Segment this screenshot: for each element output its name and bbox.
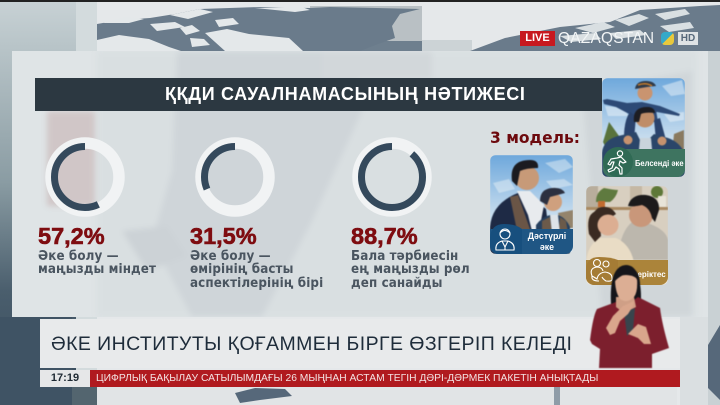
label: 3 models: 3 модель: xyxy=(490,128,580,147)
header bar xyxy=(35,78,602,111)
donut chart: 31,5% xyxy=(195,137,275,217)
headline bar xyxy=(40,319,680,368)
news ticker: ЦИФРЛЫҚ БАҚЫЛАУ САТЫЛЫМДАҒЫ 26 МЫҢНАН АСТАМ ТЕГІН ДӘРІ-ДӘРМЕК ПАКЕТІН АНЫҚТАДЫ xyxy=(96,373,598,384)
HD badge xyxy=(678,32,698,45)
donut chart: 57,2% xyxy=(45,137,125,216)
blurred map behind panel xyxy=(45,52,694,316)
stat 2: Әке болу — xyxy=(190,249,271,264)
stat 3: ең маңызды рөл xyxy=(351,262,470,277)
icon: running figure xyxy=(603,147,633,177)
live badge: LIVE xyxy=(525,32,550,44)
main translucent panel xyxy=(12,51,708,317)
icon: father and child xyxy=(586,257,618,285)
clock: 17:19 xyxy=(51,372,79,384)
badge label xyxy=(528,231,566,252)
stat 3 xyxy=(351,223,470,291)
card: traditional father xyxy=(490,155,573,254)
stat 1 xyxy=(38,223,156,277)
stat 2: өмірінің басты xyxy=(190,262,293,277)
badge label: әке xyxy=(540,242,554,252)
badge: partner father xyxy=(586,260,668,285)
channel name: QAZAQSTAN xyxy=(558,30,654,47)
clock xyxy=(40,370,90,387)
logo mark xyxy=(661,32,674,45)
card: active father xyxy=(602,78,685,177)
badge label: Дәстүрлі xyxy=(528,231,566,241)
HD badge: HD xyxy=(681,33,695,44)
card: partner father xyxy=(586,186,668,285)
stat 3: Бала тәрбиесін xyxy=(351,249,458,264)
badge: traditional father xyxy=(490,229,573,254)
stat 1: Әке болу — xyxy=(38,249,119,264)
icon: man in suit xyxy=(490,224,522,250)
headline text: ӘКЕ ИНСТИТУТЫ ҚОҒАММЕН БІРГЕ ӨЗГЕРІП КЕЛЕДІ xyxy=(51,333,572,355)
stat 2: 31,5% xyxy=(190,223,257,249)
stat 2 xyxy=(190,223,323,291)
stat 3: 88,7% xyxy=(351,223,418,249)
stat 1: маңызды міндет xyxy=(38,262,156,277)
news ticker xyxy=(90,370,680,387)
donut chart: 88,7% xyxy=(352,137,432,217)
badge label: Белсенді әке xyxy=(635,158,684,168)
heading: ҚҚДИ САУАЛНАМАСЫНЫҢ НӘТИЖЕСІ xyxy=(165,84,526,104)
stat 1: 57,2% xyxy=(38,223,105,249)
badge: active father xyxy=(603,149,685,177)
badge label: серіктес xyxy=(633,269,666,279)
stat 3: деп санайды xyxy=(351,276,443,291)
sign language interpreter xyxy=(589,264,670,369)
channel logo xyxy=(520,30,698,47)
stat 2: аспектілерінің бірі xyxy=(190,276,323,291)
live badge xyxy=(520,31,555,46)
